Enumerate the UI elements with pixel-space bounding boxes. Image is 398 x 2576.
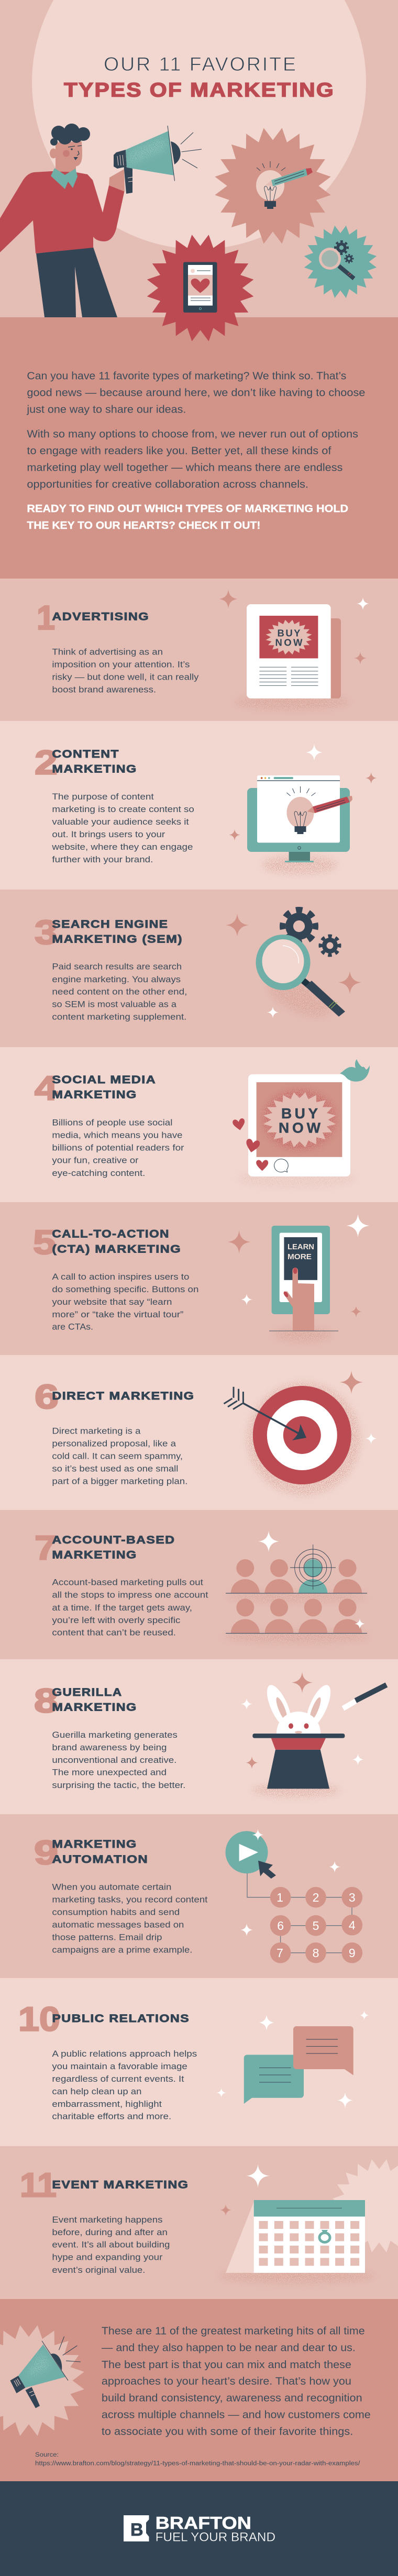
illustration: social media post [232, 1059, 370, 1189]
body text: A call to action inspires users to [52, 1272, 189, 1282]
body text: unconventional and creative. [52, 1755, 176, 1765]
intro paragraph two [27, 428, 358, 490]
intro paragraph one: just one way to share our ideas. [26, 404, 186, 416]
body text: personalized proposal, like a [52, 1438, 176, 1448]
illustration: burst with gears and magnifier [304, 226, 377, 298]
illustration: automated sequence flow: 7 [277, 1946, 283, 1960]
body text: The purpose of content [52, 792, 154, 802]
illustration: magnifier and gears [226, 907, 361, 1025]
illustration: automated sequence flow: 5 [313, 1919, 319, 1933]
heading [52, 1838, 148, 1866]
heading: CALL-TO-ACTION [52, 1228, 170, 1240]
body text [52, 1272, 198, 1332]
body text: need content on the other end, [52, 986, 187, 997]
number 11: 11 [20, 2166, 57, 2204]
heading: MARKETING [52, 762, 137, 775]
conclusion text: to associate you with some of their favorite things. [102, 2426, 353, 2437]
body text [52, 1730, 185, 1790]
body text: all the stops to impress one account [52, 1590, 208, 1600]
body text: before, during and after an [52, 2227, 168, 2237]
heading [52, 1534, 175, 1561]
source citation [35, 2452, 360, 2467]
illustration: automated sequence flow: 4 [349, 1918, 356, 1932]
illustration: social media post: NOW [279, 1119, 321, 1136]
body text: at a time. If the target gets away, [52, 1603, 192, 1613]
body text: content marketing supplement. [52, 1012, 186, 1022]
body text: When you automate certain [52, 1882, 171, 1892]
conclusion text: across multiple channels — and how customers come [102, 2410, 371, 2421]
heading [52, 748, 137, 775]
panel: 6 direct marketing [0, 1355, 398, 1510]
body text: those patterns. Email drip [52, 1933, 162, 1942]
panel: 11 event marketing [0, 2146, 398, 2299]
panel: 7 account-based marketing [0, 1510, 398, 1659]
heading: ACCOUNT-BASED [52, 1534, 175, 1546]
number 2: 2 [35, 743, 58, 782]
body text: regardless of current events. It [52, 2074, 184, 2084]
body text: eye-catching content. [52, 1168, 145, 1178]
body text [52, 1426, 187, 1486]
heading: MARKETING [52, 1549, 137, 1561]
heading: SEARCH ENGINE [52, 918, 168, 930]
conclusion text: — and they also happen to be near and dear to us. [102, 2342, 356, 2354]
number 3: 3 [35, 913, 58, 951]
panel: 1 advertising [0, 579, 398, 721]
illustration: automated sequence flow: 2 [313, 1891, 319, 1904]
source citation: Source: [35, 2452, 59, 2458]
illustration: buy now poster: NOW [275, 637, 303, 648]
illustration: rabbit in magic hat [241, 1672, 386, 1797]
body text: further with your brand. [52, 854, 153, 864]
body text: so SEM is most valuable as a [52, 1000, 176, 1009]
illustration: social media post: BUY [281, 1105, 318, 1122]
body text: part of a bigger marketing plan. [52, 1476, 187, 1486]
body text: more” or “take the virtual tour” [52, 1309, 184, 1319]
illustration: tablet and hand: LEARN [288, 1242, 314, 1251]
body text: cold call. It can seem spammy, [52, 1451, 183, 1461]
body text: billions of potential readers for [52, 1143, 184, 1153]
panel: introduction [0, 317, 398, 579]
number 8: 8 [34, 1682, 58, 1720]
body text: event’s original value. [52, 2265, 145, 2275]
illustration: tablet and hand [228, 1214, 370, 1342]
heading: EVENT MARKETING [52, 2178, 189, 2191]
panel: conclusion [0, 2299, 398, 2481]
number 7: 7 [35, 1529, 57, 1567]
intro paragraph two: marketing play well together — which means there are endless [27, 462, 342, 474]
body text: brand awareness by being [52, 1742, 167, 1752]
heading: DIRECT MARKETING [52, 1390, 194, 1402]
heading: SOCIAL MEDIA [52, 1073, 156, 1086]
body text: imposition on your attention. It’s [52, 660, 190, 670]
body text: do something specific. Buttons on [52, 1284, 198, 1294]
illustration: buy now poster [219, 590, 369, 710]
illustration: man with megaphone [0, 124, 202, 317]
panel: 10 public relations [0, 1978, 398, 2146]
icon: bird [340, 1059, 370, 1082]
body text: Event marketing happens [52, 2215, 162, 2225]
intro paragraph one: Can you have 11 favorite types of marketing? We think so. That’s [27, 370, 346, 382]
intro call to action [27, 503, 348, 531]
illustration: calendar [218, 2159, 398, 2283]
conclusion text: The best part is that you can mix and match these [102, 2359, 351, 2371]
panel: 5 call-to-action marketing [0, 1202, 398, 1355]
illustration: audience with target [223, 1531, 370, 1643]
conclusion text [102, 2326, 371, 2437]
body text [52, 2049, 197, 2122]
heading: MARKETING (SEM) [52, 933, 183, 946]
intro paragraph two: With so many options to choose from, we never run out of options [27, 428, 358, 440]
panel: 4 social media marketing [0, 1047, 398, 1202]
number 6: 6 [35, 1378, 59, 1416]
illustration: automated sequence flow: 6 [277, 1919, 284, 1933]
body text: marketing tasks, you record content [52, 1895, 208, 1905]
body text: The more unexpected and [52, 1768, 167, 1778]
body text: content that can’t be reused. [52, 1628, 176, 1638]
heading: MARKETING [52, 1838, 137, 1850]
body text: charitable efforts and more. [52, 2112, 171, 2122]
brand logo: FUEL YOUR BRAND [156, 2530, 275, 2544]
panel: 8 guerilla marketing [0, 1659, 398, 1814]
intro paragraph one: good news — because around here, we don’t like having to choose [27, 387, 365, 399]
heading [52, 1073, 156, 1101]
body text [52, 2215, 170, 2275]
intro call to action: THE KEY TO OUR HEARTS? CHECK IT OUT! [27, 520, 260, 531]
body text [52, 962, 187, 1022]
hero background [0, 0, 398, 317]
brand logo [124, 2513, 275, 2544]
heading: AUTOMATION [52, 1853, 148, 1866]
body text: so it’s best used as one small [52, 1464, 178, 1474]
heading: GUERILLA [52, 1686, 123, 1698]
body text [52, 1578, 208, 1638]
number 9: 9 [34, 1834, 58, 1872]
body text: your website that say “learn [52, 1297, 172, 1307]
body text: your fun, creative or [52, 1156, 139, 1165]
number 10: 10 [18, 2000, 60, 2038]
conclusion text: approaches to your heart’s desire. That’s how you [102, 2375, 351, 2387]
illustration: burst with phone and heart [147, 235, 253, 341]
heading [52, 918, 183, 946]
footer [0, 2481, 398, 2576]
conclusion text: These are 11 of the greatest marketing hits of all time [102, 2326, 365, 2337]
intro paragraph one [26, 370, 365, 416]
illustration: automated sequence flow: 8 [313, 1946, 319, 1960]
body text [52, 647, 199, 694]
body text: Direct marketing is a [52, 1426, 141, 1436]
body text: campaigns are a prime example. [52, 1945, 192, 1955]
body text: Paid search results are search [52, 962, 182, 972]
heading: PUBLIC RELATIONS [52, 2012, 190, 2025]
illustration: burst with light bulb and pencil [215, 128, 331, 244]
brand logo: BRAFTON [156, 2513, 251, 2533]
body text: Guerilla marketing generates [52, 1730, 178, 1740]
brand logo: B [130, 2520, 143, 2540]
number 1: 1 [37, 598, 55, 637]
body text: media, which means you have [52, 1130, 182, 1140]
title: OUR 11 FAVORITE [104, 53, 296, 75]
body text: website, where they can engage [51, 842, 193, 852]
body text: Account-based marketing pulls out [52, 1578, 203, 1587]
body text: surprising the tactic, the better. [52, 1780, 185, 1790]
heading: ADVERTISING [52, 610, 149, 623]
body text: valuable your audience seeks it [52, 817, 189, 827]
body text: event. It’s all about building [52, 2240, 170, 2250]
title: TYPES OF MARKETING [64, 80, 335, 102]
panel: 9 marketing automation [0, 1814, 398, 1978]
body text [52, 1117, 184, 1178]
body text: you maintain a favorable image [52, 2061, 187, 2071]
body text: out. It brings users to your [52, 829, 165, 839]
heading: MARKETING [52, 1701, 137, 1713]
body text: A public relations approach helps [52, 2049, 197, 2059]
body text: embarrassment, highlight [52, 2099, 162, 2109]
body text: hype and expanding your [52, 2252, 163, 2262]
body text [51, 792, 194, 864]
intro paragraph two: opportunities for creative collaboration across channels. [27, 479, 308, 490]
source citation: https://www.brafton.com/blog/strategy/11-types-of-marketing-that-should-be-on-your-radar-with-examples/ [35, 2461, 360, 2467]
body text: engine marketing. You always [52, 974, 181, 984]
heading: MARKETING [52, 1089, 137, 1101]
number 5: 5 [33, 1223, 56, 1261]
heading: (CTA) MARKETING [52, 1242, 181, 1255]
conclusion megaphone in burst [0, 2325, 84, 2436]
number 4: 4 [35, 1069, 58, 1107]
body text: are CTAs. [52, 1322, 93, 1332]
illustration: automated sequence flow: 9 [349, 1946, 356, 1960]
illustration: target and arrow [224, 1371, 377, 1495]
body text: consumption habits and send [52, 1907, 180, 1917]
body text: Billions of people use social [52, 1117, 172, 1127]
body text: boost brand awareness. [52, 685, 156, 694]
panel: 3 search engine marketing [0, 890, 398, 1047]
illustration: speech bubbles [217, 2011, 369, 2108]
heading: CONTENT [52, 748, 119, 760]
illustration: buy now poster: BUY [278, 627, 301, 638]
illustration: automated sequence flow: 3 [349, 1891, 356, 1904]
panel: 2 content marketing [0, 721, 398, 890]
body text: can help clean up an [52, 2086, 141, 2096]
body text: you’re left with overly specific [52, 1615, 181, 1625]
body text: Think of advertising as an [52, 647, 163, 657]
illustration: desktop monitor with idea [229, 744, 377, 874]
illustration: automated sequence flow [225, 1829, 362, 1963]
body text: marketing is to create content so [52, 804, 194, 814]
intro paragraph two: to engage with readers like you. Better yet, all these kinds of [27, 445, 331, 457]
illustration: tablet and hand: MORE [288, 1252, 312, 1261]
heading [52, 1686, 137, 1713]
title [64, 53, 335, 102]
heading [52, 1228, 181, 1255]
illustration: automated sequence flow: 1 [277, 1891, 283, 1904]
body text: automatic messages based on [52, 1919, 184, 1930]
body text: risky — but done well, it can really [52, 672, 199, 682]
body text [52, 1882, 208, 1955]
conclusion text: build brand consistency, awareness and recognition [102, 2393, 362, 2404]
intro call to action: READY TO FIND OUT WHICH TYPES OF MARKETING HOLD [27, 503, 348, 515]
